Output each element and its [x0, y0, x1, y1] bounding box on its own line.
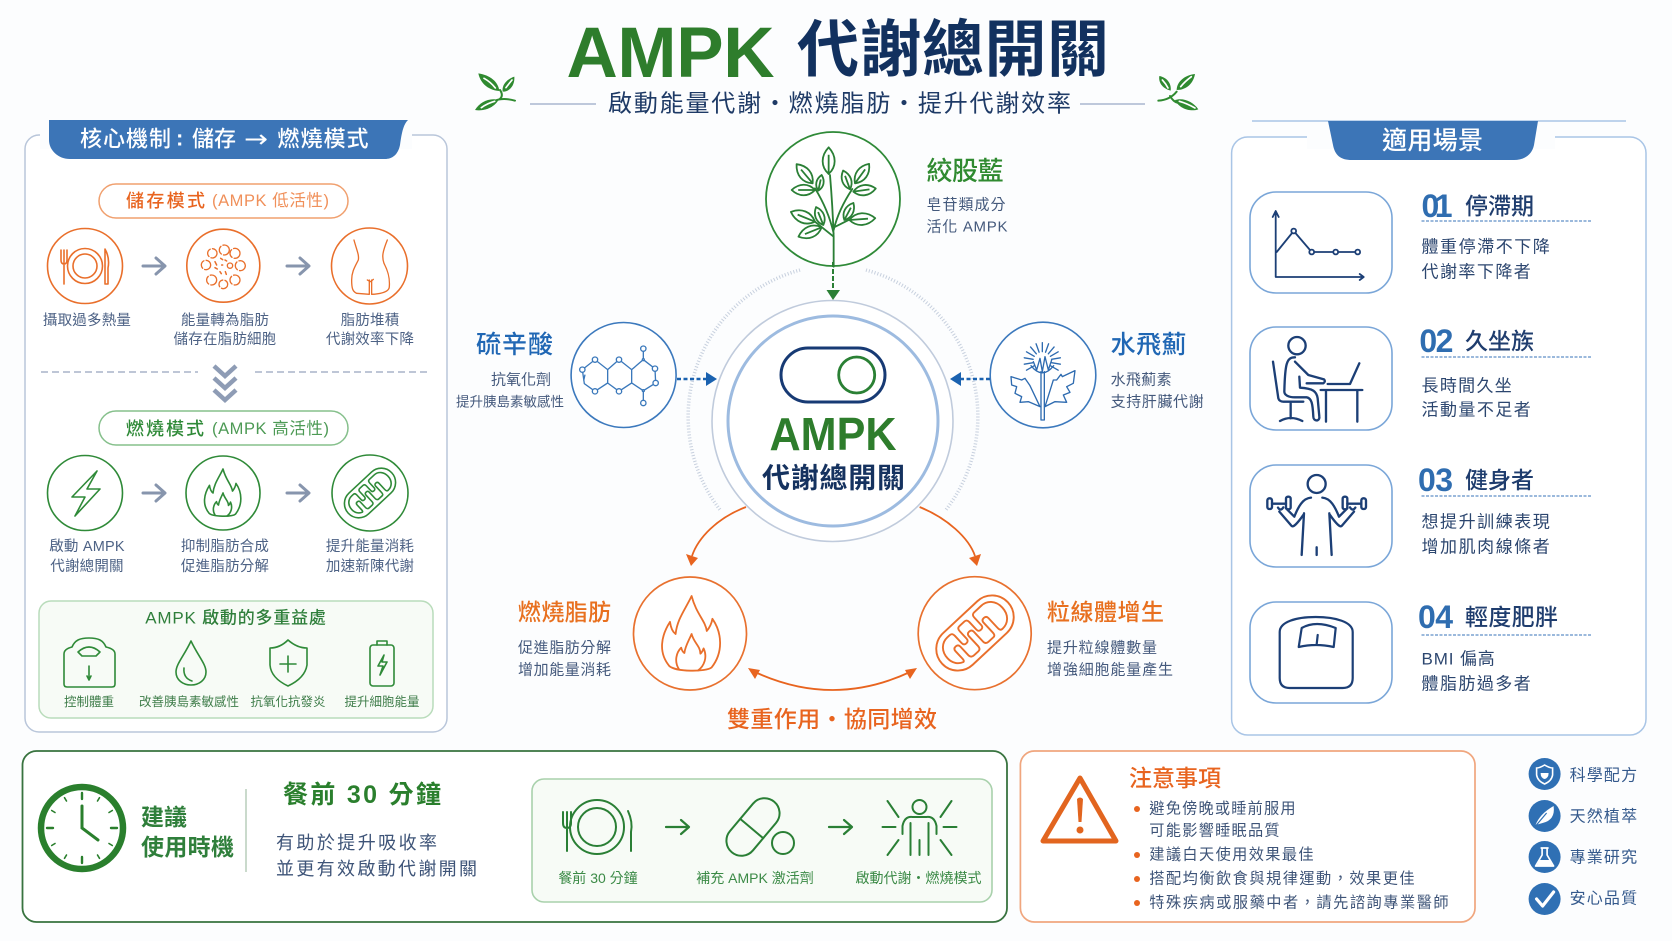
benefits box: 提升細胞能量	[344, 694, 420, 709]
scenario 03	[1250, 462, 1592, 567]
arrow: switch to burn fat	[686, 507, 746, 566]
benefits box: 改善胰島素敏感性	[139, 694, 239, 709]
icon: flame	[662, 596, 720, 671]
scenario 04: 輕度肥胖	[1465, 604, 1559, 630]
mode transition divider	[41, 366, 428, 400]
icon: plate	[48, 228, 122, 304]
panel header tab: :	[176, 126, 183, 150]
panel header tab: 燃燒模式	[278, 126, 368, 152]
icon: capsule	[720, 792, 794, 862]
benefits box: AMPK 啟動的多重益處	[145, 608, 327, 628]
effect: mitochondrial biogenesis: 提升粒線體數量	[1047, 640, 1158, 656]
panel: suggested timing	[22, 751, 1007, 922]
timing flow: 補充 AMPK 激活劑	[696, 870, 814, 886]
storage mode pill: (AMPK 低活性)	[212, 191, 329, 210]
scenario 02: 久坐族	[1465, 328, 1535, 354]
icon: molecule	[580, 346, 658, 406]
effect: burn fat: 增加能量消耗	[518, 662, 612, 678]
title: 代謝總開關	[797, 16, 1109, 85]
timing flow: 啟動代謝・燃燒模式	[856, 870, 982, 886]
ingredient: lipoic acid: 抗氧化劑	[491, 372, 552, 388]
effect: burn fat: 燃燒脂肪	[518, 599, 611, 625]
effect: mitochondrial biogenesis: 粒線體增生	[1047, 599, 1164, 625]
icon: plant	[789, 147, 876, 267]
effect: mitochondrial biogenesis	[918, 577, 1174, 690]
ingredient: gynostemma: 活化 AMPK	[926, 218, 1008, 236]
benefits box	[39, 601, 433, 718]
ingredient: gynostemma: 皂苷類成分	[926, 196, 1006, 214]
ingredient: milk thistle: 支持肝臟代謝	[1111, 394, 1205, 410]
badge: natural: 天然植萃	[1570, 808, 1639, 826]
timing flow	[532, 779, 992, 902]
badge: natural	[1529, 800, 1639, 832]
timing detail	[276, 781, 477, 879]
scenario 03: 增加肌肉線條者	[1422, 538, 1552, 556]
scenario 01: 代謝率下降者	[1422, 262, 1532, 282]
captions: burn row: 抑制脂肪合成	[181, 538, 269, 555]
burn mode pill	[99, 411, 348, 445]
ingredient: milk thistle	[990, 322, 1205, 428]
timing detail: 餐前 30 分鐘	[283, 781, 441, 809]
panel: suitable scenarios	[1232, 121, 1646, 735]
icon: flame	[186, 456, 260, 530]
storage mode pill: 儲存模式	[126, 191, 205, 211]
ingredient: gynostemma: 絞股藍	[926, 156, 1004, 186]
decorative dashed halo arcs	[688, 270, 978, 511]
captions: storage row: 代謝效率下降	[326, 331, 414, 348]
precautions list: 可能影響睡眠品質	[1149, 822, 1281, 840]
arrow	[666, 820, 689, 834]
benefits box: 控制體重	[64, 694, 114, 709]
icon: seated desk worker	[1273, 337, 1362, 422]
burn mode pill: (AMPK 高活性)	[212, 419, 329, 438]
icon: energized person	[882, 800, 956, 855]
ingredient: gynostemma	[766, 132, 1008, 267]
panel header tab	[1328, 121, 1538, 160]
icon: thistle	[1011, 343, 1075, 420]
captions: storage row: 儲存在脂肪細胞	[174, 331, 276, 348]
scenario 03: 03	[1418, 462, 1453, 498]
panel: precautions	[1020, 751, 1475, 922]
panel header tab: →	[244, 125, 268, 153]
timing detail: 並更有效啟動代謝開關	[276, 859, 477, 879]
arrow	[143, 258, 165, 274]
icon: fat cells	[187, 229, 260, 302]
icon: belly and hips	[332, 228, 408, 304]
arrow	[287, 258, 309, 274]
captions: burn row: 啟動 AMPK	[49, 538, 125, 555]
badge: science: 科學配方	[1570, 766, 1639, 784]
panel: core mechanism	[25, 120, 447, 732]
icon: scale	[64, 638, 115, 687]
icon: right sprig	[1158, 74, 1198, 110]
quality badges	[1529, 758, 1639, 915]
scenario 02: 長時間久坐	[1422, 376, 1514, 396]
scenario 01: 01	[1422, 188, 1452, 224]
burn mode pill: 燃燒模式	[126, 419, 204, 439]
captions: burn row: 加速新陳代謝	[326, 558, 414, 575]
captions: storage row: 攝取過多熱量	[43, 311, 131, 329]
scenario 02: 活動量不足者	[1422, 400, 1532, 420]
precautions list	[1134, 800, 1450, 912]
captions: storage row: 能量轉為脂肪	[181, 312, 269, 329]
title: AMPK	[566, 14, 774, 93]
captions: burn row: 代謝總開關	[50, 558, 124, 575]
precautions list: 搭配均衡飲食與規律運動，效果更佳	[1149, 870, 1416, 888]
icon: clock	[41, 787, 123, 869]
center switch	[712, 300, 953, 542]
ingredient: lipoic acid: 硫辛酸	[476, 331, 553, 359]
icon: shield	[270, 640, 307, 686]
title	[566, 14, 1109, 93]
captions: storage row	[43, 311, 414, 348]
badge: quality: 安心品質	[1570, 890, 1639, 908]
icon: plateau chart	[1273, 211, 1364, 280]
scenario 04: 04	[1418, 599, 1453, 635]
scenario 03: 想提升訓練表現	[1422, 512, 1552, 532]
captions: storage row: 脂肪堆積	[341, 312, 400, 329]
icon: mitochondrion	[332, 455, 408, 531]
arrow: lipoic acid to switch	[677, 372, 717, 386]
icon: lightning	[48, 456, 122, 530]
dual effect label: 雙重作用・協同增效	[727, 706, 937, 732]
icon: warning triangle	[1043, 778, 1116, 841]
precautions list: 避免傍晚或睡前服用	[1149, 800, 1297, 818]
badge: research	[1529, 841, 1639, 873]
panel: precautions: 注意事項	[1129, 765, 1221, 791]
arrow: milk thistle to switch	[950, 372, 990, 386]
ingredient: milk thistle: 水飛薊	[1111, 331, 1187, 359]
scenario 01	[1250, 188, 1592, 293]
badge: quality	[1529, 883, 1639, 915]
scenario 01: 停滯期	[1465, 193, 1535, 219]
arrow: gynostemma to switch	[826, 262, 840, 300]
scenario 02: 02	[1419, 323, 1453, 359]
badge: research: 專業研究	[1570, 848, 1639, 866]
scenario 02	[1250, 323, 1592, 430]
captions: burn row: 促進脂肪分解	[181, 558, 269, 575]
ingredient: milk thistle: 水飛薊素	[1111, 372, 1173, 388]
icon: battery	[370, 641, 394, 686]
timing flow: 餐前 30 分鐘	[558, 870, 638, 886]
effect: burn fat: 促進脂肪分解	[518, 640, 612, 656]
icon: plate	[563, 800, 632, 854]
icon: mitochondrion	[927, 586, 1023, 680]
timing label: 建議	[141, 804, 187, 830]
center switch: AMPK	[770, 408, 896, 460]
scenario 04	[1250, 599, 1592, 703]
icon: drop	[176, 641, 206, 685]
arrow	[287, 485, 309, 501]
timing detail: 有助於提升吸收率	[276, 833, 437, 853]
captions: burn row	[49, 538, 414, 575]
center switch: 代謝總開關	[762, 462, 905, 494]
arrow	[829, 820, 852, 834]
subtitle: 啟動能量代謝・燃燒脂肪・提升代謝效率	[608, 90, 1071, 118]
arrow: switch to mitochondria	[920, 507, 981, 566]
icon: person with dumbbells	[1267, 475, 1366, 555]
icon: bathroom scale	[1280, 617, 1353, 688]
precautions list: 建議白天使用效果最佳	[1149, 846, 1315, 864]
storage mode pill	[99, 184, 348, 218]
effect: mitochondrial biogenesis: 增強細胞能量產生	[1047, 662, 1174, 678]
panel header tab: 儲存	[192, 126, 236, 152]
scenario 04: 體脂肪過多者	[1422, 674, 1532, 694]
badge: science	[1529, 758, 1639, 790]
scenario 01: 體重停滯不下降	[1422, 238, 1552, 256]
arrow	[143, 485, 165, 501]
arrow: dual synergy	[748, 668, 917, 690]
icon: left sprig	[475, 73, 515, 110]
ingredient: lipoic acid: 提升胰島素敏感性	[456, 394, 564, 410]
benefits box: 抗氧化抗發炎	[250, 694, 326, 709]
captions: burn row: 提升能量消耗	[326, 538, 414, 555]
scenario 04: BMI 偏高	[1422, 650, 1496, 668]
effect: burn fat	[518, 577, 746, 690]
ingredient: lipoic acid	[456, 322, 676, 428]
panel header tab	[49, 120, 408, 159]
timing label	[141, 804, 234, 860]
scenario 03: 健身者	[1465, 467, 1535, 493]
panel header tab: 核心機制	[80, 126, 171, 152]
precautions list: 特殊疾病或服藥中者，請先諮詢專業醫師	[1149, 894, 1450, 912]
panel header tab: 適用場景	[1382, 127, 1483, 155]
icon: toggle	[781, 348, 885, 402]
timing label: 使用時機	[141, 834, 234, 860]
